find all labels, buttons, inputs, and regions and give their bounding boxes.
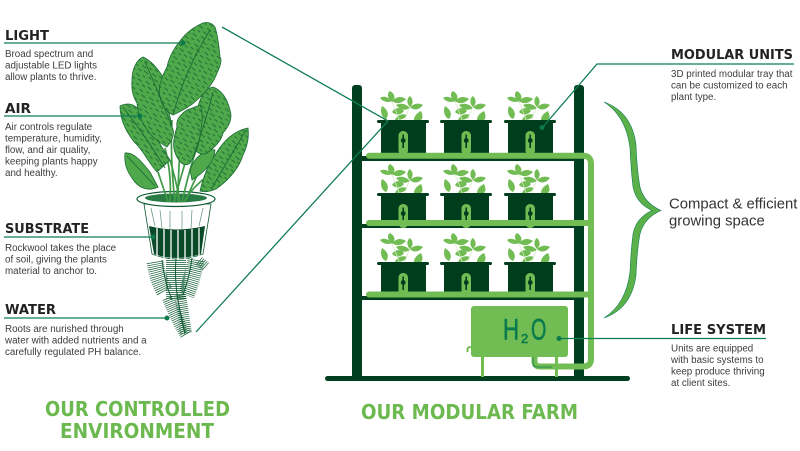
description: Units are equipped xyxy=(671,344,753,354)
leaf stems xyxy=(158,120,205,202)
callout: light xyxy=(4,28,186,83)
description: temperature, humidity, xyxy=(5,134,102,144)
label: compact and efficient: growing space xyxy=(669,214,765,230)
tank label: 2 xyxy=(521,331,528,346)
leaf texture xyxy=(120,22,248,192)
description: and healthy. xyxy=(5,168,58,179)
dot xyxy=(556,336,562,341)
title: our modular farm: OUR MODULAR FARM xyxy=(361,400,578,424)
description: at client sites. xyxy=(671,378,730,389)
rack posts and base xyxy=(325,85,630,381)
leaves xyxy=(120,22,248,192)
leaf veins xyxy=(125,30,246,188)
brace: compact growing space xyxy=(604,102,661,318)
description: water with added nutrients and a xyxy=(4,336,147,346)
leader line: light to modular farm xyxy=(196,27,388,332)
tank label xyxy=(503,312,546,347)
description: material to anchor to. xyxy=(5,266,97,277)
heading: AIR xyxy=(5,101,32,117)
title: our controlled environment: ENVIRONMENT xyxy=(60,419,214,443)
connector xyxy=(4,317,167,319)
description: of soil, giving the plants xyxy=(5,254,107,266)
description: Air controls regulate xyxy=(5,122,93,133)
heading: LIFE SYSTEM xyxy=(671,322,766,338)
illustration: spinach plant in net basket xyxy=(120,22,248,335)
modular farm rack xyxy=(325,85,630,381)
dot xyxy=(138,114,142,118)
description: Rockwool takes the place xyxy=(5,243,117,254)
dot xyxy=(180,40,186,46)
connector xyxy=(559,338,766,340)
connector xyxy=(542,64,794,128)
pots row 1 xyxy=(377,91,556,155)
title: our controlled environment: OUR CONTROLLED xyxy=(45,397,230,421)
heading: LIGHT xyxy=(5,28,50,44)
description: 3D printed modular tray that xyxy=(671,69,793,80)
description: plant type. xyxy=(671,92,716,103)
callout: substrate xyxy=(4,221,156,277)
callout: modular units xyxy=(540,47,794,130)
heading: SUBSTRATE xyxy=(5,221,89,237)
tank label: H xyxy=(503,312,519,346)
label: compact and efficient: Compact & efficient xyxy=(669,196,798,212)
description: allow plants to thrive. xyxy=(5,72,96,83)
pots row 2 xyxy=(377,164,556,228)
callout: water xyxy=(4,302,170,358)
water tank xyxy=(468,306,568,377)
connector xyxy=(4,42,183,44)
callout: life system xyxy=(556,322,766,389)
description: Broad spectrum and xyxy=(5,49,93,60)
dot xyxy=(540,125,544,130)
description: adjustable LED lights xyxy=(5,60,97,72)
description: with basic systems to xyxy=(670,355,764,366)
description: carefully regulated PH balance. xyxy=(5,347,141,358)
water pipes and shelves xyxy=(369,156,591,366)
heading: WATER xyxy=(5,302,57,318)
dot xyxy=(164,316,170,320)
tank label: O xyxy=(531,314,546,347)
heading: MODULAR UNITS xyxy=(671,47,793,63)
dot xyxy=(150,234,156,240)
connector xyxy=(4,115,140,117)
description: keep produce thriving xyxy=(671,366,765,378)
callout: air xyxy=(4,101,142,179)
inner pipe line xyxy=(533,356,552,367)
description: can be customized to each xyxy=(671,80,788,92)
description: Roots are nurished through xyxy=(5,324,124,335)
description: keeping plants happy xyxy=(5,156,98,168)
net basket xyxy=(137,192,215,260)
pots row 3 xyxy=(377,233,556,297)
description: flow, and air quality, xyxy=(5,145,90,156)
connector xyxy=(4,236,153,238)
roots xyxy=(155,258,206,335)
